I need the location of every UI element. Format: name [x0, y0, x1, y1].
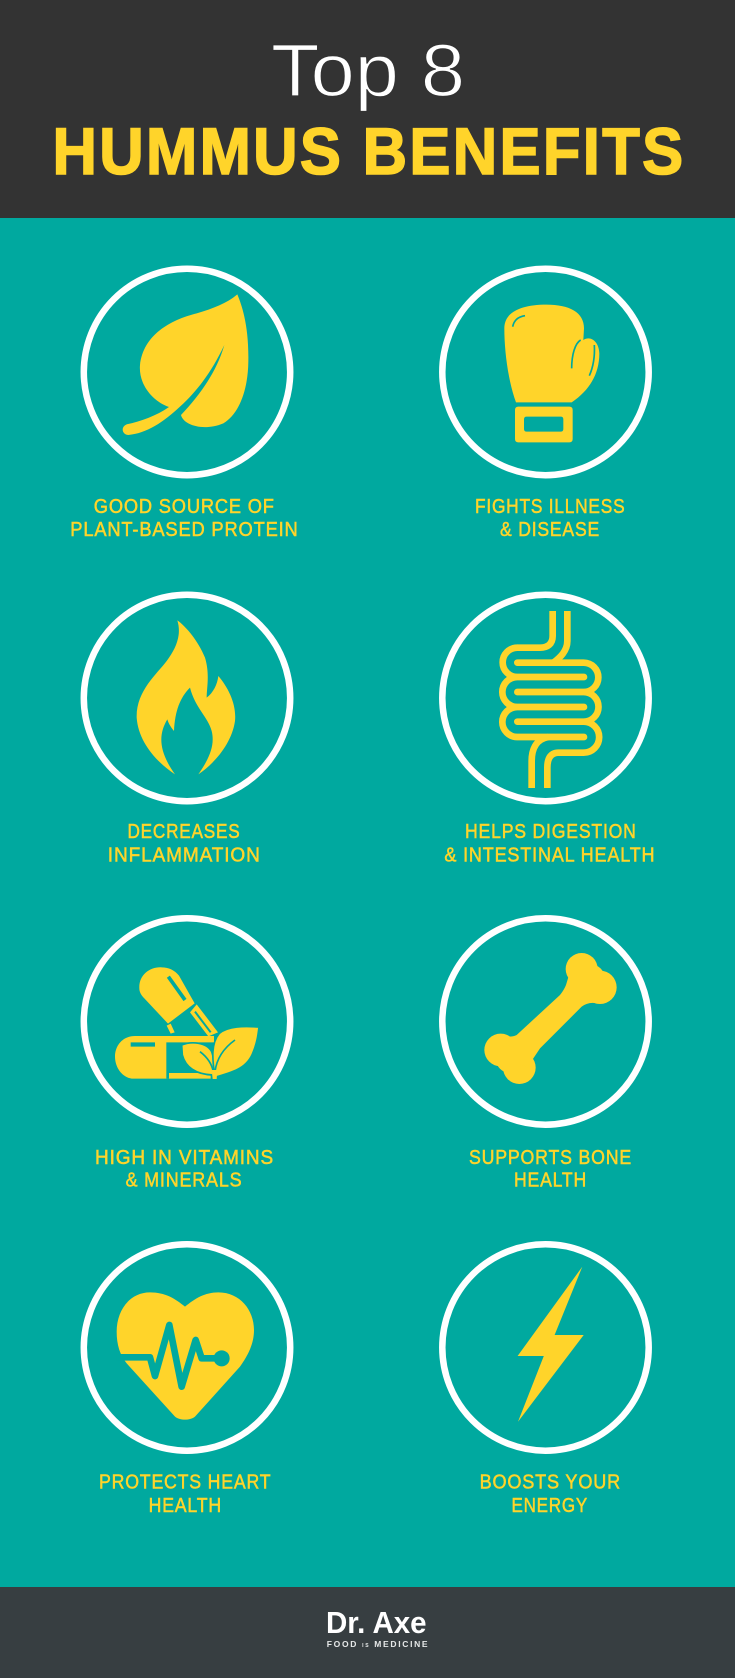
logo: Dr. Axe: Dr. Axe: [326, 1605, 427, 1640]
label: FIGHTS ILLNESS: [475, 496, 625, 518]
label: [469, 1147, 632, 1192]
icon: bone: [484, 953, 617, 1084]
title line: Top 8: Top 8: [271, 29, 465, 112]
label: DECREASES: [128, 821, 240, 843]
label: [70, 496, 299, 541]
icon: heart with pulse: [117, 1292, 254, 1420]
label: HEALTH: [514, 1170, 587, 1192]
icon: lightning bolt: [518, 1267, 584, 1422]
label: [444, 821, 655, 866]
icon: capsules and leaves: [115, 967, 259, 1079]
label: & INTESTINAL HEALTH: [444, 844, 655, 866]
panel: plant-based protein: [70, 269, 299, 541]
label: SUPPORTS BONE: [469, 1147, 632, 1169]
icon: boxing glove: [504, 305, 599, 442]
label: PROTECTS HEART: [99, 1472, 271, 1494]
label: BOOSTS YOUR: [480, 1472, 621, 1494]
panel: heart health: [84, 1244, 290, 1517]
header banner: [0, 0, 735, 218]
icon: flame: [137, 620, 235, 774]
label: [99, 1472, 271, 1517]
label: & DISEASE: [500, 519, 600, 541]
label: GOOD SOURCE OF: [94, 496, 275, 518]
label: ENERGY: [512, 1495, 588, 1517]
panel: fights illness: [442, 269, 649, 541]
panel: boosts energy: [442, 1244, 649, 1517]
icon: leaf: [123, 294, 248, 435]
panel: digestion: [442, 595, 655, 866]
panel: vitamins and minerals: [84, 918, 290, 1192]
tagline: FOOD IS MEDICINE: [327, 1639, 428, 1649]
icon: intestine: [502, 611, 599, 788]
label: [95, 1147, 274, 1192]
label: HIGH IN VITAMINS: [95, 1147, 274, 1169]
panel: bone health: [442, 918, 649, 1192]
label: HEALTH: [149, 1495, 222, 1517]
label: PLANT-BASED PROTEIN: [70, 519, 299, 541]
label: [475, 496, 625, 541]
label: HELPS DIGESTION: [465, 821, 637, 843]
label: [108, 821, 261, 866]
title line: Hummus Benefits: HUMMUS BENEFITS: [52, 114, 686, 188]
label: [480, 1472, 621, 1517]
label: INFLAMMATION: [108, 844, 261, 866]
label: & MINERALS: [126, 1170, 242, 1192]
footer banner: [0, 1587, 735, 1678]
panel: decreases inflammation: [84, 595, 290, 866]
